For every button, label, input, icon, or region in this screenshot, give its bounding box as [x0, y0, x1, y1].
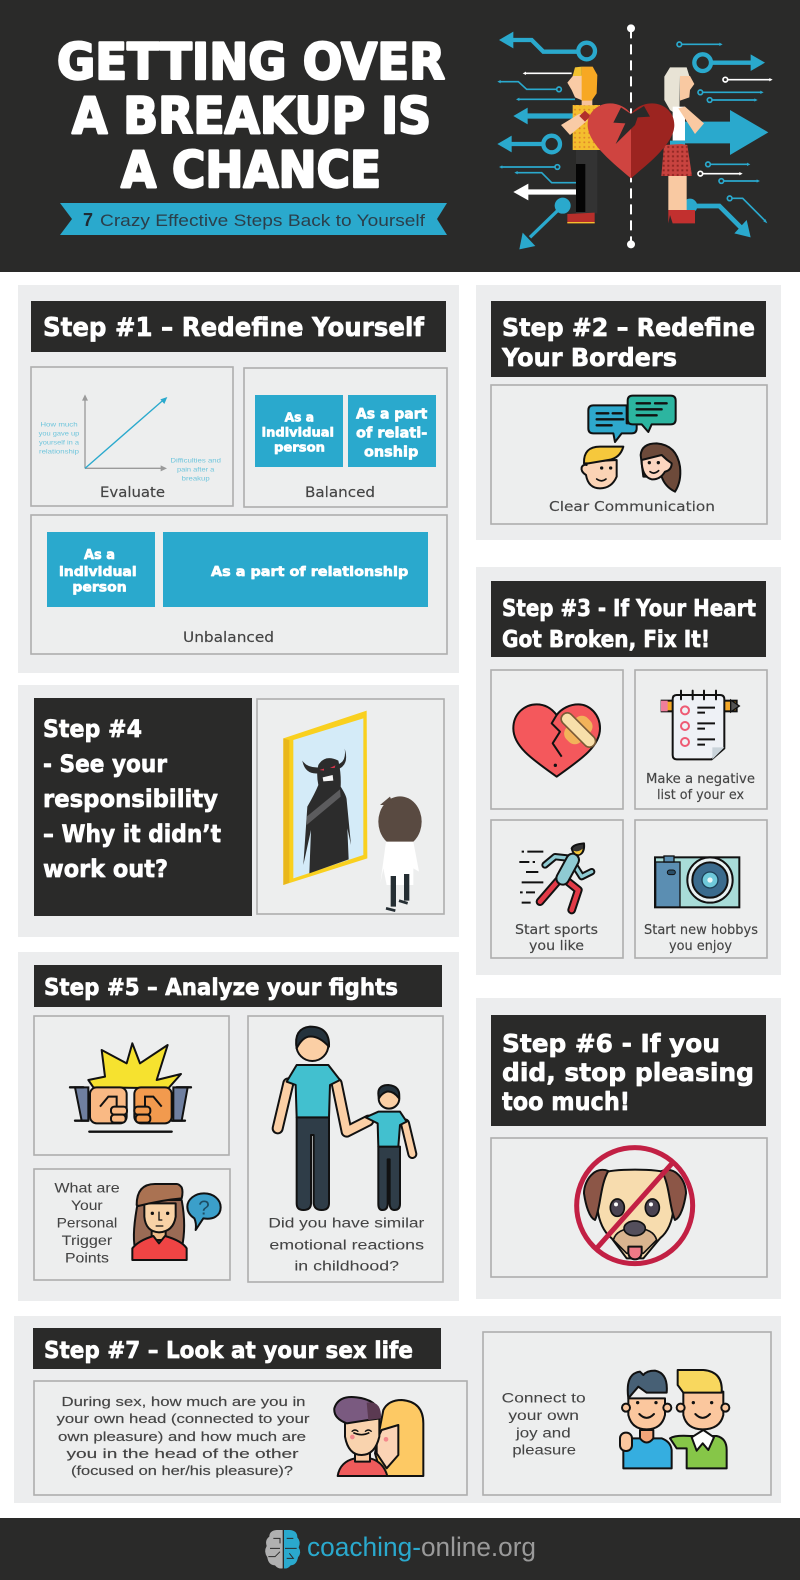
heading: step 3 [491, 581, 766, 657]
card: unbalanced: As a [84, 548, 115, 563]
card: start sports: Start sports [515, 922, 598, 938]
card: unbalanced: individual [59, 565, 137, 580]
card: negative list: list of your ex [657, 787, 744, 803]
header banner [0, 0, 800, 272]
icon: running person [519, 843, 592, 910]
heading: step 4: responsibility [43, 785, 218, 813]
card: balanced: As a part [356, 406, 428, 422]
card: during sex: own pleasure) and how much are [58, 1429, 306, 1444]
card: trigger points: Trigger [62, 1233, 113, 1248]
card: new hobbies [635, 820, 767, 958]
card: balanced: As a [285, 410, 314, 425]
title [57, 33, 445, 199]
card: connect to your own joy: your own [508, 1408, 579, 1423]
heading: step 7 [33, 1328, 441, 1369]
panel: step 4 [18, 685, 459, 937]
icon: bandaged heart [513, 704, 604, 777]
icon: brain logo [265, 1530, 300, 1569]
subtitle ribbon: 7 [83, 210, 93, 230]
heading: step 6: Step #6 - If you [502, 1029, 720, 1058]
card: connect to your own joy [483, 1332, 771, 1495]
icon: father and child: in childhood? [294, 1259, 400, 1274]
title: A CHANCE [121, 141, 381, 199]
card: during sex: you in the head of the other [66, 1446, 299, 1461]
card: negative list: Make a negative [646, 771, 755, 787]
icon: confused woman [132, 1184, 221, 1260]
panel: step 6 [476, 998, 781, 1299]
woman [668, 176, 687, 210]
subtitle ribbon [60, 203, 447, 235]
card: evaluate chart: yourself in a [39, 439, 79, 446]
heading: step 5: Step #5 – Analyze your fights [44, 973, 398, 1001]
card: during sex: your own head (connected to your [56, 1411, 310, 1426]
title: GETTING OVER [57, 33, 445, 91]
footer [0, 1518, 800, 1580]
card: trigger points [34, 1169, 230, 1280]
card: during sex: (focused on her/his pleasure)? [71, 1463, 293, 1478]
heading: step 1: Step #1 – Redefine Yourself [43, 313, 425, 343]
card: no dog [491, 1138, 767, 1277]
icon: two people talking [582, 396, 680, 492]
heading: step 7: Step #7 – Look at your sex life [44, 1336, 413, 1364]
card: balanced: onship [364, 445, 418, 461]
icon: notepad checklist [661, 691, 739, 759]
panel: step 2 [476, 285, 781, 540]
card: evaluate chart: Evaluate [100, 485, 165, 501]
heading: step 4: – Why it didn’t [43, 820, 221, 848]
card: evaluate chart: Difficulties and [170, 457, 221, 464]
card: evaluate chart: you gave up [39, 431, 80, 438]
card: new hobbies: you enjoy [669, 938, 732, 954]
panel: step 7 [14, 1316, 781, 1503]
icon: mirror with monster and person [283, 711, 422, 911]
panel: step 5 [18, 952, 459, 1301]
card: evaluate chart: relationship [39, 449, 79, 456]
panel: step 1 [18, 285, 459, 673]
man [576, 150, 597, 213]
title: A BREAKUP IS [72, 87, 431, 145]
heading: step 3: Got Broken, Fix It! [502, 625, 710, 653]
card: fists [34, 1016, 229, 1155]
icon: two friends [620, 1370, 729, 1468]
icon: crossed-out dog [577, 1148, 693, 1264]
card: childhood [248, 1016, 443, 1282]
website url: online.org [421, 1532, 536, 1562]
card: connect to your own joy: Connect to [502, 1391, 586, 1406]
icon: confused woman: ? [198, 1196, 210, 1219]
website url [307, 1532, 536, 1562]
card: start sports [491, 820, 623, 958]
card: balanced: person [274, 440, 325, 455]
icon: couple kissing [334, 1397, 423, 1476]
card: clear communication: Clear Communication [549, 499, 715, 515]
card: balanced [244, 368, 447, 507]
card: balanced: individual [262, 425, 334, 440]
card: mended heart [491, 670, 623, 809]
card: trigger points: Personal [57, 1216, 117, 1231]
icon: father and child: Did you have similar [268, 1216, 425, 1231]
heading: step 5 [34, 965, 442, 1007]
card: balanced: Balanced [305, 485, 375, 501]
card: trigger points: Points [65, 1250, 109, 1265]
heading: step 4: work out? [43, 855, 168, 883]
card: balanced: of relati- [356, 425, 428, 441]
card: unbalanced [31, 515, 447, 654]
illustration: broken heart couple with arrows [497, 24, 773, 249]
card: evaluate chart: How much [40, 422, 78, 429]
heading: step 6 [491, 1015, 766, 1126]
card: trigger points: Your [71, 1198, 103, 1213]
heading: step 2 [491, 301, 766, 377]
heading: step 2: Step #2 – Redefine [502, 313, 755, 342]
card: evaluate chart: pain after a [177, 466, 215, 473]
icon: father and child: emotional reactions [269, 1237, 424, 1252]
icon: camera [655, 856, 739, 907]
card: new hobbies: Start new hobbys [644, 922, 758, 938]
icon: father and child [268, 1027, 425, 1274]
card: unbalanced: As a part of relationship [211, 565, 408, 580]
heading: step 2: Your Borders [501, 343, 677, 372]
heading: step 3: Step #3 - If Your Heart [502, 594, 756, 622]
card: evaluate chart: breakup [182, 475, 210, 482]
heading: step 6: did, stop pleasing [502, 1058, 754, 1087]
website url: coaching- [307, 1532, 421, 1562]
card: unbalanced: Unbalanced [183, 630, 274, 646]
card: evaluate chart [31, 367, 233, 506]
card: during sex [34, 1381, 467, 1495]
card: clear communication [491, 385, 767, 524]
card: mirror illustration [257, 699, 444, 914]
heading: step 6: too much! [502, 1087, 630, 1116]
heading: step 1 [31, 301, 446, 352]
heading: step 4: Step #4 [43, 715, 142, 743]
panel: step 3 [476, 567, 781, 975]
heart [588, 103, 631, 178]
card: unbalanced: person [72, 581, 127, 596]
card: connect to your own joy: joy and [515, 1425, 571, 1440]
subtitle ribbon: Crazy Effective Steps Back to Yourself [100, 211, 425, 230]
card: during sex: During sex, how much are you in [62, 1394, 306, 1409]
heading: step 4: - See your [43, 750, 167, 778]
card: negative list [635, 670, 767, 809]
heading: step 4 [34, 698, 252, 916]
icon: fist bump [70, 1043, 191, 1132]
card: connect to your own joy: pleasure [512, 1442, 576, 1457]
card: trigger points: What are [54, 1181, 120, 1196]
card: start sports: you like [529, 938, 584, 954]
